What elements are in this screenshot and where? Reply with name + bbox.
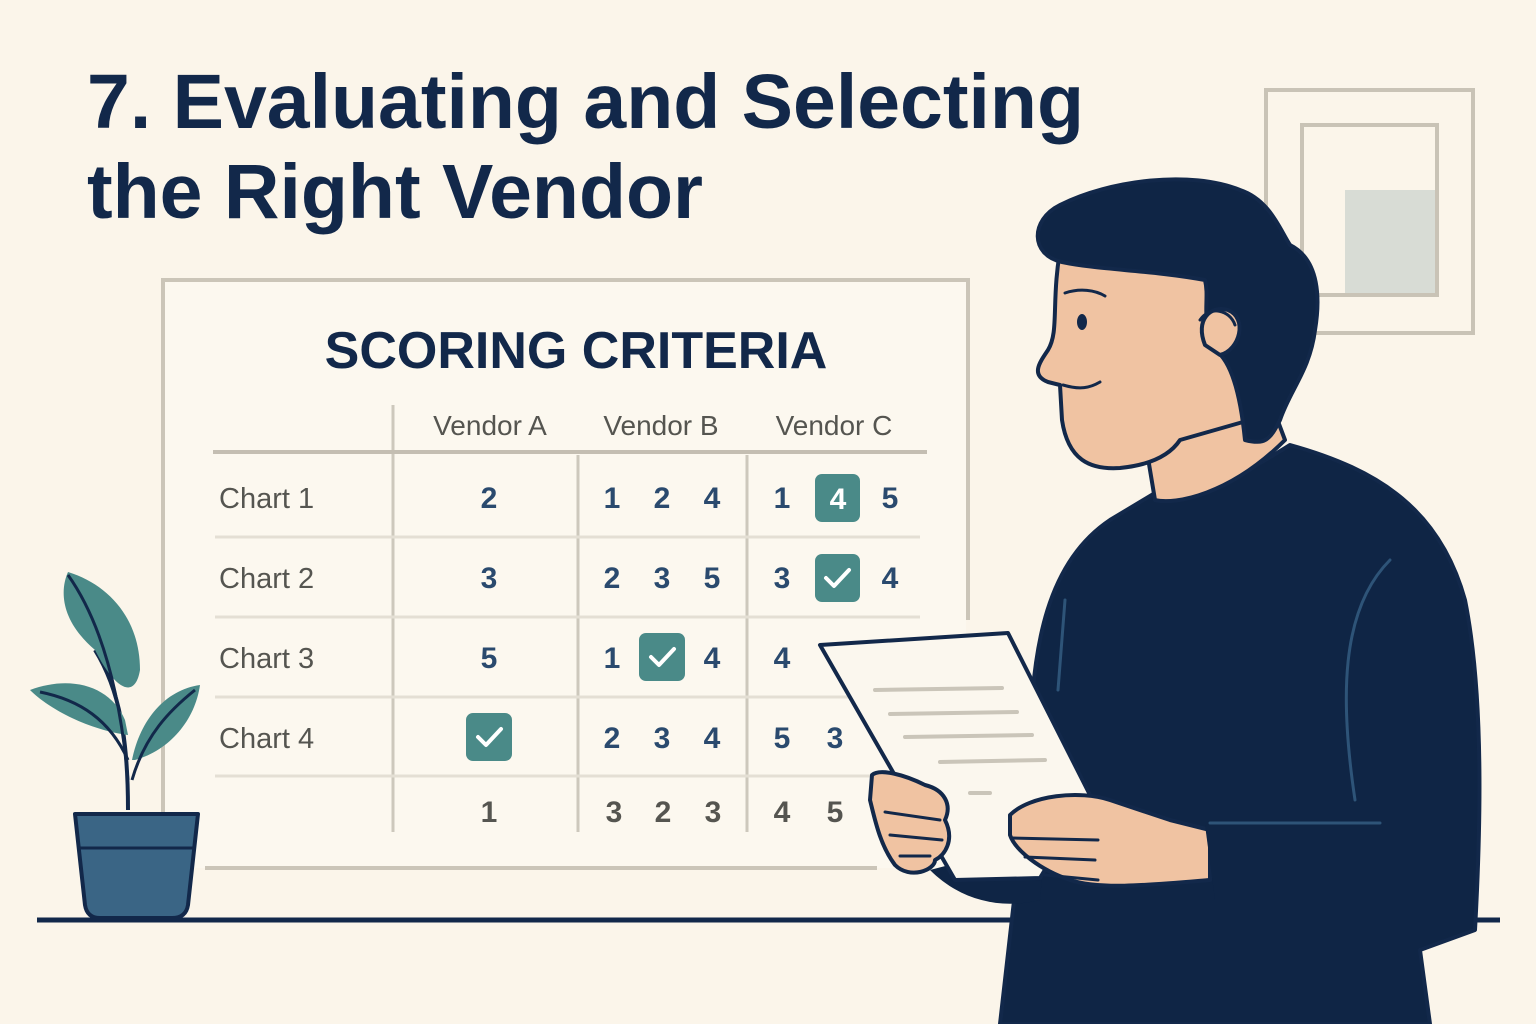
sweater seams	[1058, 560, 1390, 823]
paper	[820, 633, 1090, 880]
scores: 2	[604, 562, 620, 595]
scores: 1	[604, 482, 620, 515]
row labels	[219, 483, 314, 755]
left arm	[930, 840, 1045, 904]
scores: 4	[704, 642, 721, 675]
table header	[433, 410, 892, 441]
right sleeve cuff	[1205, 825, 1300, 900]
pot	[75, 814, 198, 918]
table header: Vendor A	[433, 410, 547, 441]
scores: 4	[704, 482, 721, 515]
sweater body	[1000, 445, 1479, 1024]
checkboxes	[466, 474, 860, 761]
left hand	[870, 772, 949, 873]
table	[213, 405, 927, 832]
scores: 3	[654, 562, 670, 595]
scores: 3	[481, 562, 497, 595]
scores: 5	[882, 482, 898, 515]
scoring board	[163, 280, 968, 870]
right hand	[1010, 795, 1210, 886]
person	[820, 179, 1479, 1024]
face	[1038, 240, 1250, 468]
scores: 4	[830, 483, 847, 516]
row labels: Chart 2	[219, 563, 314, 595]
row labels: Chart 3	[219, 643, 314, 675]
table: 5	[827, 796, 843, 829]
scores: 5	[481, 642, 497, 675]
scores: 3	[774, 562, 790, 595]
scores: 3	[654, 722, 670, 755]
scores: 4	[704, 722, 721, 755]
scores: 4	[882, 562, 899, 595]
scores: 2	[481, 482, 497, 515]
ear	[1202, 309, 1240, 355]
board heading: SCORING CRITERIA	[325, 322, 827, 380]
scores: 1	[604, 642, 620, 675]
scores: 4	[774, 642, 791, 675]
scores: 5	[704, 562, 720, 595]
hair	[1038, 179, 1317, 442]
scores: 2	[604, 722, 620, 755]
scores: 5	[774, 722, 790, 755]
row labels: Chart 4	[219, 723, 314, 755]
scores: 3	[827, 722, 843, 755]
scores	[481, 482, 899, 755]
table header: Vendor B	[603, 410, 719, 441]
scores: 1	[774, 482, 790, 515]
table: 1	[481, 796, 497, 829]
table: 3	[705, 796, 721, 829]
table: 2	[655, 796, 671, 829]
title	[87, 59, 1084, 235]
title: the Right Vendor	[87, 149, 703, 235]
neck	[1145, 400, 1285, 501]
title: 7. Evaluating and Selecting	[87, 59, 1084, 145]
row labels: Chart 1	[219, 483, 314, 515]
table header: Vendor C	[776, 410, 892, 441]
wall frame	[1266, 90, 1473, 333]
scores: 2	[654, 482, 670, 515]
floor line	[37, 918, 1500, 922]
eye, brow, smile	[1077, 314, 1087, 330]
table: 4	[774, 796, 791, 829]
table: 3	[606, 796, 622, 829]
plant	[30, 572, 200, 918]
